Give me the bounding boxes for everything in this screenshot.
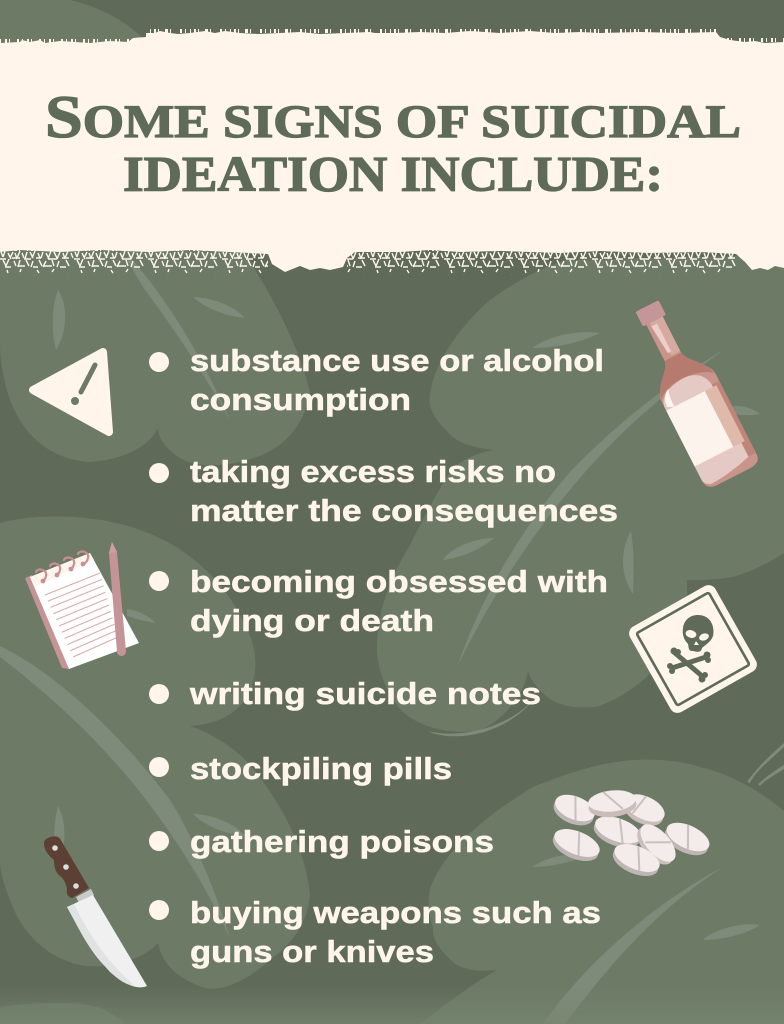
icon: knife — [44, 836, 147, 987]
icon: pills — [549, 788, 714, 882]
title: SOME SIGNS OF SUICIDAL — [45, 84, 741, 150]
bullet list — [149, 343, 618, 969]
torn top edge fibres — [0, 31, 784, 249]
bullet 4: writing suicide notes — [189, 676, 541, 711]
torn edge speckles — [0, 250, 268, 275]
bullet 1: substance use or alcohol — [190, 343, 604, 378]
bullet 5: stockpiling pills — [190, 751, 452, 786]
bullet 7: buying weapons such as — [190, 895, 601, 930]
bottom fade — [0, 985, 784, 1024]
bullet 2: taking excess risks no — [190, 454, 556, 489]
bullet 3: becoming obsessed with — [190, 564, 608, 599]
icon: notepad and pencil — [25, 542, 139, 669]
header banner — [0, 31, 784, 275]
bullet 1: consumption — [190, 382, 411, 417]
bullet 3 — [149, 564, 608, 638]
bullet 1 — [149, 343, 604, 417]
bullet 6: gathering poisons — [190, 824, 494, 859]
title: IDEATION INCLUDE: — [123, 146, 663, 202]
bullet 2 — [149, 454, 618, 528]
icon: wine bottle — [620, 292, 761, 490]
title — [45, 84, 741, 202]
bullet 7 — [149, 895, 601, 969]
bullet 2: matter the consequences — [190, 493, 618, 528]
bullet 3: dying or death — [190, 603, 434, 638]
leaf veins and highlights — [0, 255, 784, 1024]
icon: poison skull sign — [626, 582, 760, 716]
icon: warning triangle — [33, 352, 109, 432]
bullet 7: guns or knives — [190, 934, 434, 969]
